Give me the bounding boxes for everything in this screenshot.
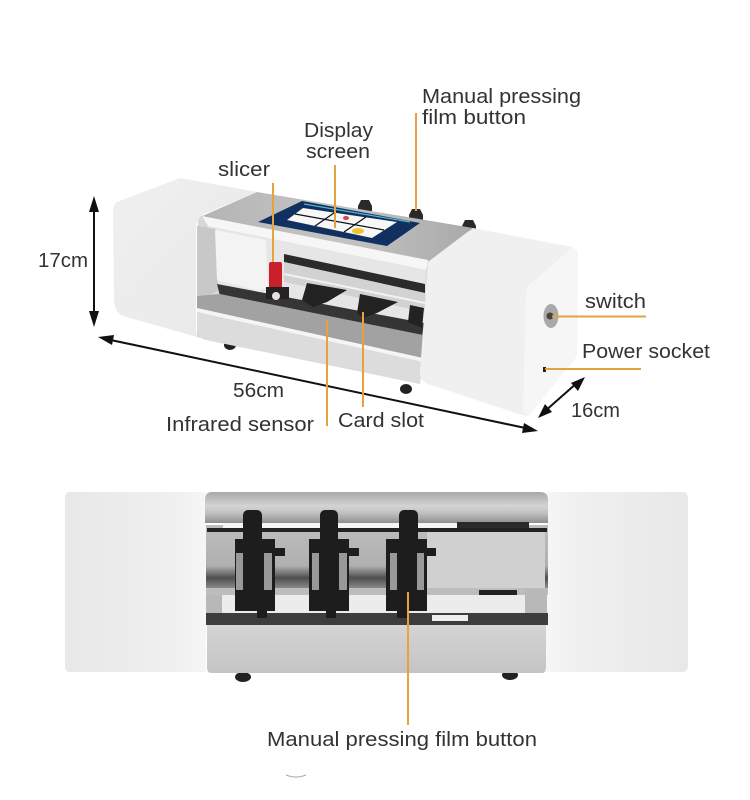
- rail assembly: [208, 226, 426, 326]
- film pressers: [302, 283, 424, 328]
- feet: [224, 340, 412, 394]
- upper silver roller: [205, 492, 548, 523]
- leader: display screen: [334, 165, 336, 228]
- icon: switch: [544, 304, 558, 328]
- label: infrared sensor: Infrared sensor: [166, 414, 314, 436]
- leader: front button: [407, 592, 409, 725]
- label: card slot: Card slot: [338, 410, 424, 432]
- track: [217, 284, 424, 337]
- leader: infrared sensor: [326, 320, 328, 426]
- leader: card slot: [362, 312, 364, 407]
- label: manual pressing film button: Manual pressing: [422, 86, 581, 108]
- left end cap: [65, 492, 206, 672]
- silver plate inner surface: [197, 294, 423, 358]
- presser 3: [386, 510, 436, 618]
- machine: perspective view: [113, 178, 578, 416]
- inner cavity: [206, 525, 548, 593]
- machine: front view: [65, 492, 688, 682]
- label: 56cm: 56cm: [233, 380, 284, 402]
- label: manual pressing film button, front: Manual pressing film button: [267, 729, 537, 751]
- label: manual pressing film button: film button: [422, 107, 526, 129]
- display screen: [258, 201, 420, 246]
- orange leader lines: [273, 113, 646, 725]
- leader: power socket: [545, 368, 641, 370]
- icon: red slicer: [266, 262, 289, 300]
- front silver plate: [197, 312, 423, 384]
- left end cap: [113, 178, 257, 337]
- leader: switch: [552, 316, 646, 318]
- labels: [38, 86, 710, 751]
- leader: manual pressing film button: [415, 113, 417, 211]
- right end cap: [546, 492, 688, 672]
- arrow: 17cm height: [89, 196, 99, 327]
- leader: slicer: [272, 183, 274, 262]
- right end cap: [420, 228, 578, 416]
- white carriage block: [215, 230, 268, 291]
- arrow: 56cm length: [98, 335, 538, 433]
- silver top panel: [200, 192, 473, 262]
- label: power socket: Power socket: [582, 341, 710, 363]
- label: display screen: Display: [304, 120, 373, 142]
- label: 17cm: 17cm: [38, 250, 88, 272]
- label: display screen: screen: [306, 141, 370, 163]
- icon: power socket: [543, 367, 546, 372]
- label: display screen: [304, 120, 373, 163]
- label: 16cm: 16cm: [571, 400, 620, 422]
- label: switch: switch: [585, 291, 646, 313]
- dimension arrows: [89, 196, 585, 433]
- presser 2: [309, 510, 359, 618]
- white front strip: [202, 216, 428, 270]
- lower silver plate: [207, 625, 546, 673]
- arrow: 16cm depth: [538, 377, 585, 418]
- label: manual pressing film button: [422, 86, 581, 129]
- feet: [235, 672, 251, 682]
- label: slicer: slicer: [218, 159, 270, 181]
- presser 1: [235, 510, 285, 618]
- icon: top knobs: [358, 200, 476, 231]
- middle cavity back: [197, 217, 428, 384]
